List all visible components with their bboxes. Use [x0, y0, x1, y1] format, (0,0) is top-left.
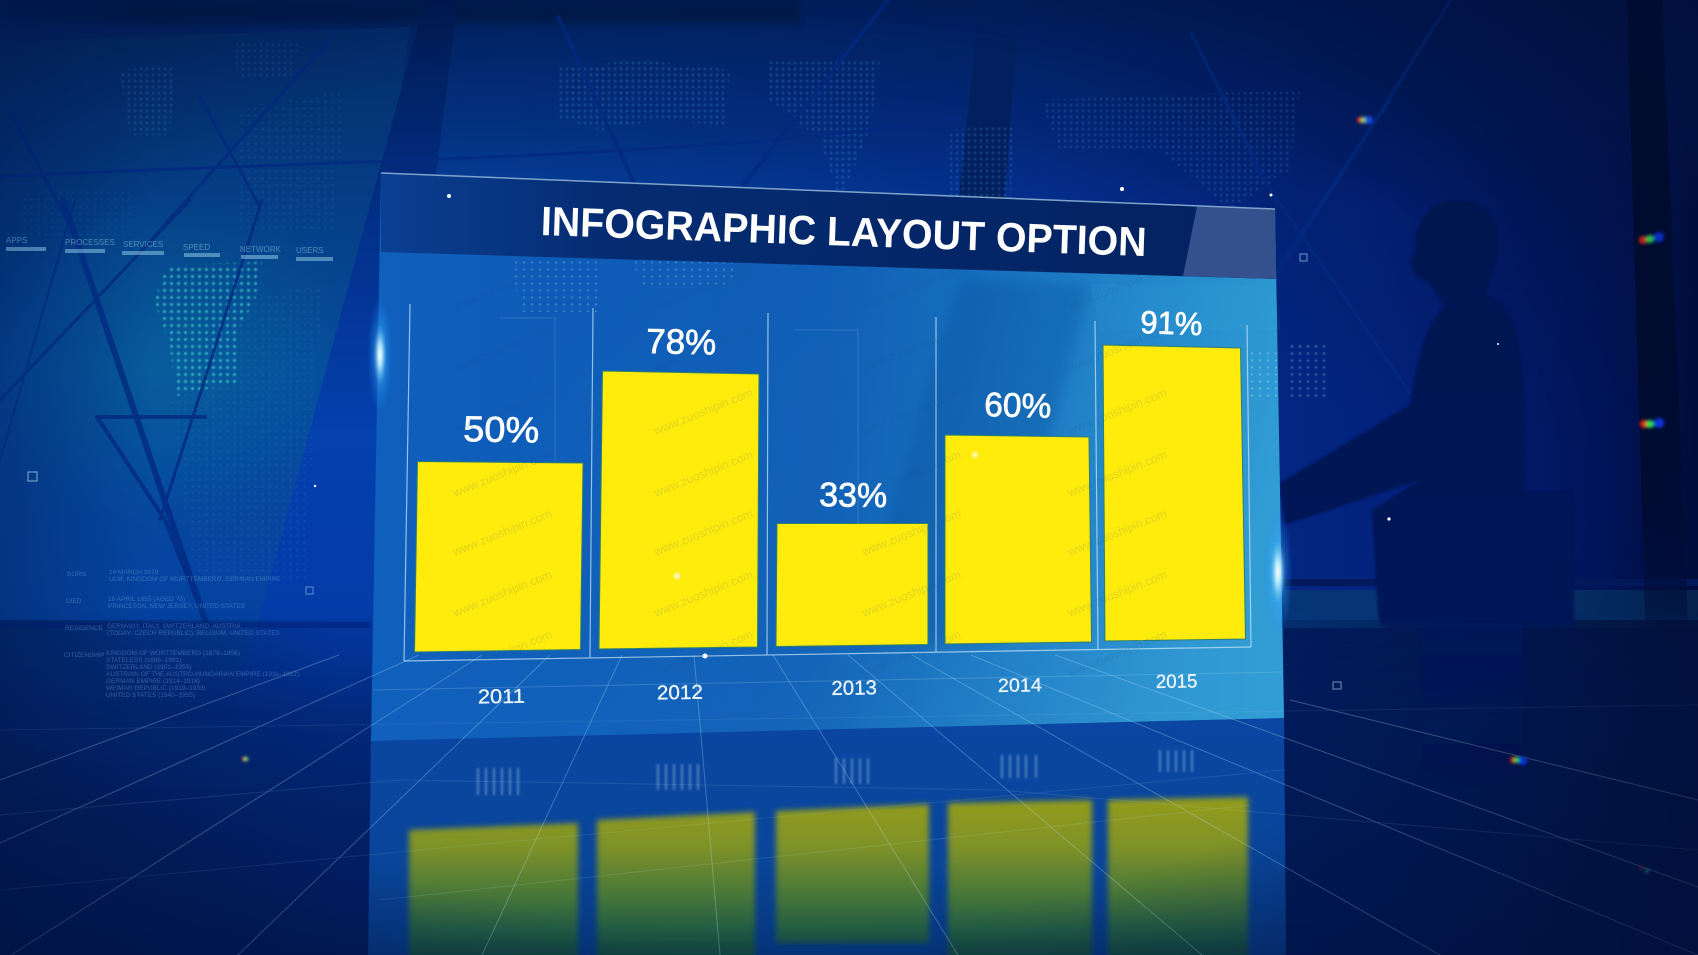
- left biography text block: [64, 569, 299, 699]
- left biography text block: PRINCETON, NEW JERSEY, UNITED STATES: [108, 603, 246, 610]
- watermark text: www.zuoshipin.com: [450, 322, 554, 375]
- watermark text: www.zuoshipin.com: [651, 261, 755, 314]
- left biography text block: CITIZENSHIP: [64, 652, 104, 659]
- year labels: 2015: [1156, 671, 1198, 693]
- left biography text block: ULM, KINGDOM OF WÜRTTEMBERG, GERMAN EMPIRE: [109, 575, 281, 583]
- floor perspective grid: [0, 655, 1698, 955]
- watermark text: www.zuoshipin.com: [1065, 385, 1169, 438]
- watermark text: www.zuoshipin.com: [859, 567, 963, 620]
- year labels: 2011: [478, 686, 525, 708]
- floor: [0, 610, 1698, 955]
- left interface labels: SPEED: [183, 243, 210, 252]
- chromatic light dots: [242, 116, 1664, 873]
- watermark text: www.zuoshipin.com: [859, 322, 963, 375]
- watermark text: www.zuoshipin.com: [450, 506, 554, 559]
- left biography text block: SWITZERLAND (1901–1955): [106, 664, 191, 671]
- watermark text: www.zuoshipin.com: [450, 447, 554, 500]
- main chart panel: [371, 173, 1284, 741]
- left biography text block: RESIDENCE: [65, 625, 104, 632]
- truss lines: [0, 0, 1451, 620]
- percentage labels: 78%: [646, 322, 717, 362]
- left biography text block: WEIMAR REPUBLIC (1919–1933): [106, 685, 206, 692]
- watermark text: [450, 261, 1169, 680]
- watermark text: www.zuoshipin.com: [651, 506, 755, 559]
- watermark text: www.zuoshipin.com: [1065, 567, 1169, 620]
- percentage labels: 50%: [463, 408, 540, 451]
- left biography text block: UNITED STATES (1940–1955): [106, 692, 195, 699]
- watermark text: www.zuoshipin.com: [1065, 447, 1169, 500]
- watermark text: www.zuoshipin.com: [651, 322, 755, 375]
- watermark text: www.zuoshipin.com: [1065, 261, 1169, 314]
- left biography text block: GERMAN EMPIRE (1914–1918): [106, 678, 200, 685]
- year labels: [478, 671, 1198, 708]
- watermark text: www.zuoshipin.com: [450, 261, 554, 314]
- watermark text: www.zuoshipin.com: [651, 385, 755, 438]
- small checkbox markers: [28, 254, 1341, 747]
- watermark text: www.zuoshipin.com: [859, 627, 963, 680]
- left interface labels: APPS: [6, 236, 27, 245]
- watermark text: www.zuoshipin.com: [651, 567, 755, 620]
- left biography text block: STATELESS (1896–1901): [106, 657, 181, 664]
- watermark text: www.zuoshipin.com: [859, 261, 963, 314]
- year labels: 2013: [831, 677, 877, 700]
- left interface labels: SERVICES: [123, 240, 163, 249]
- watermark text: www.zuoshipin.com: [450, 385, 554, 438]
- left interface labels: [6, 236, 333, 261]
- panel edge light flares: [367, 295, 1293, 636]
- percentage labels: 91%: [1140, 304, 1203, 342]
- year labels: 2014: [998, 675, 1043, 697]
- reflected bars: [409, 797, 1248, 955]
- left biography text block: DIED: [66, 598, 82, 605]
- percentage labels: 60%: [984, 386, 1052, 426]
- dotted world maps on back wall: [20, 40, 1330, 580]
- watermark text: www.zuoshipin.com: [651, 447, 755, 500]
- left biography text block: BORN: [67, 571, 86, 578]
- watermark text: www.zuoshipin.com: [651, 627, 755, 680]
- percentage labels: [463, 304, 1203, 515]
- watermark text: www.zuoshipin.com: [450, 627, 554, 680]
- horizon band on right wall: [0, 579, 1698, 630]
- title banner: [381, 173, 1276, 279]
- left interface labels: USERS: [296, 246, 324, 255]
- dark structural beams: [232, 0, 1020, 720]
- panel faint inner frames: [500, 318, 858, 640]
- left biography text block: AUSTRIAN OF THE AUSTRO-HUNGARIAN EMPIRE (1911–1912): [106, 671, 299, 678]
- watermark text: www.zuoshipin.com: [1065, 506, 1169, 559]
- watermark text: www.zuoshipin.com: [859, 506, 963, 559]
- watermark text: www.zuoshipin.com: [1065, 322, 1169, 375]
- bars: [414, 345, 1246, 652]
- panel dot texture: [511, 256, 1283, 400]
- left interface labels: PROCESSES: [65, 238, 115, 247]
- left biography text block: 14 MARCH 1879: [109, 569, 159, 576]
- watermark text: www.zuoshipin.com: [859, 447, 963, 500]
- watermark text: www.zuoshipin.com: [450, 567, 554, 620]
- left biography text block: KINGDOM OF WÜRTTEMBERG (1879–1896): [106, 649, 240, 657]
- left biography text block: 18 APRIL 1955 (AGED 76): [108, 596, 185, 603]
- sparkle particles: [314, 187, 1499, 658]
- year labels: 2012: [657, 682, 703, 704]
- left biography text block: (TODAY: CZECH REPUBLIC), BELGIUM, UNITED STATES: [107, 630, 281, 637]
- panel horizontal floor lines: [373, 672, 1282, 690]
- left biography text block: GERMANY, ITALY, SWITZERLAND, AUSTRIA: [107, 623, 241, 630]
- bar 2011: [414, 462, 583, 652]
- panel floor reflection: [368, 718, 1286, 955]
- percentage labels: 33%: [819, 476, 888, 515]
- right dark pillar: [1627, 0, 1692, 720]
- bar 2014: [945, 435, 1092, 644]
- chart gridlines: [404, 304, 1251, 661]
- left glass pane: [0, 0, 410, 720]
- bar 2012: [599, 371, 759, 649]
- watermark text: www.zuoshipin.com: [1065, 627, 1169, 680]
- watermark text: www.zuoshipin.com: [859, 385, 963, 438]
- left interface labels: NETWORK: [240, 245, 282, 254]
- reflected year labels: [478, 750, 1192, 795]
- bar 2013: [776, 524, 928, 646]
- silhouette of seated person: [1280, 201, 1574, 790]
- bar 2015: [1103, 345, 1246, 641]
- title text: INFOGRAPHIC LAYOUT OPTION: [540, 198, 1147, 265]
